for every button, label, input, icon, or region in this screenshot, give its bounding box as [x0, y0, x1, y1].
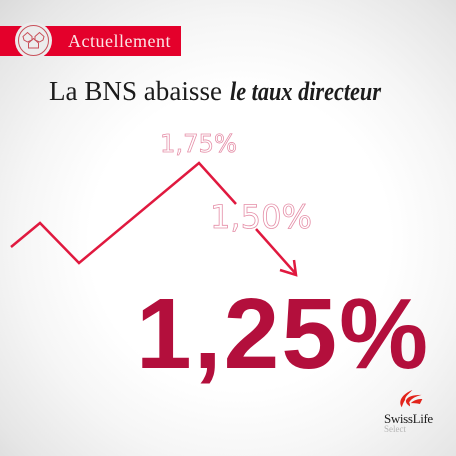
logo subtext: Select [384, 424, 406, 434]
value: 1,25% main: 1,25% [136, 280, 428, 390]
logo mark [400, 390, 422, 408]
logo wordmark: SwissLife [384, 411, 433, 426]
trend line [11, 163, 236, 263]
value: 1,75% outlined: 1,75% [160, 129, 237, 158]
title: le taux directeur [230, 76, 382, 106]
title [49, 76, 382, 106]
badge label: Actuellement [68, 31, 171, 51]
logo: Swiss Life Select [384, 390, 433, 434]
value: 1,50% outlined: 1,50% [210, 198, 312, 236]
icon: houses in circle [15, 25, 52, 56]
badge: Actuellement [0, 26, 181, 56]
title: La BNS abaisse [49, 76, 222, 106]
arrow [256, 229, 296, 275]
